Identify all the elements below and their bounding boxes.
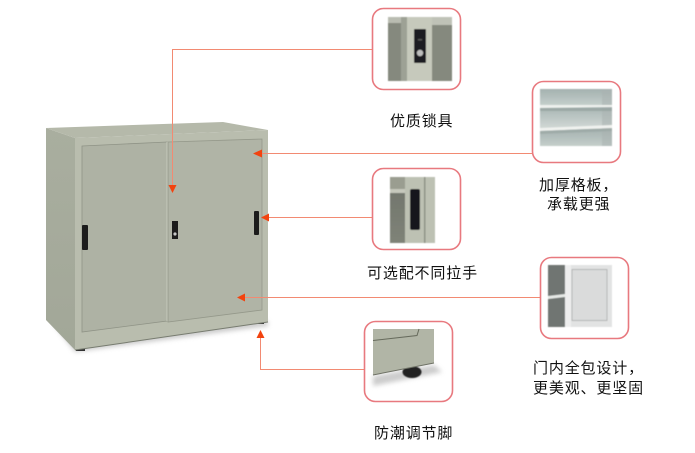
- cabinet left side: [46, 128, 75, 350]
- frame: [372, 8, 460, 90]
- label: foot: 防潮调节脚: [374, 425, 453, 442]
- frame: [540, 258, 628, 338]
- right sliding door: [168, 139, 262, 322]
- frame: [532, 82, 620, 162]
- label: lock: 优质锁具: [390, 113, 453, 130]
- arrow: door callout: [237, 294, 540, 302]
- cabinet shadow: [52, 321, 268, 352]
- frame: [372, 168, 460, 250]
- arrow: shelf callout: [253, 150, 532, 158]
- panel: lock detail: [372, 8, 460, 90]
- label: door: 门内全包设计，: [533, 359, 644, 377]
- photo: handle: [390, 177, 435, 243]
- arrow: handle callout: [261, 214, 372, 222]
- frame: [364, 322, 452, 402]
- right door handle: [254, 211, 259, 235]
- door lock: [172, 221, 178, 239]
- label: door: 更美观、更坚固: [533, 380, 644, 397]
- photo: lock: [388, 17, 452, 81]
- left sliding door: [82, 142, 167, 332]
- label: door: [533, 359, 644, 397]
- arrow: foot callout: [256, 330, 364, 370]
- cabinet illustration: [46, 122, 268, 352]
- cabinet top: [46, 122, 268, 138]
- panel: shelf detail: [532, 82, 620, 162]
- panel: foot detail: [364, 322, 452, 402]
- cabinet feet: [76, 321, 264, 351]
- label: shelf: [539, 176, 618, 213]
- photo: foot: [373, 329, 442, 386]
- arrow: lock callout: [168, 50, 372, 193]
- panel: door detail: [540, 258, 628, 338]
- cabinet front frame: [75, 130, 268, 350]
- label: shelf: 承载更强: [547, 196, 610, 213]
- label: shelf: 加厚格板，: [539, 176, 618, 194]
- label: handle: 可选配不同拉手: [367, 265, 478, 282]
- panel: handle detail: [372, 168, 460, 250]
- photo: door interior: [548, 265, 612, 327]
- left door handle: [82, 225, 88, 250]
- photo: shelves: [540, 89, 612, 146]
